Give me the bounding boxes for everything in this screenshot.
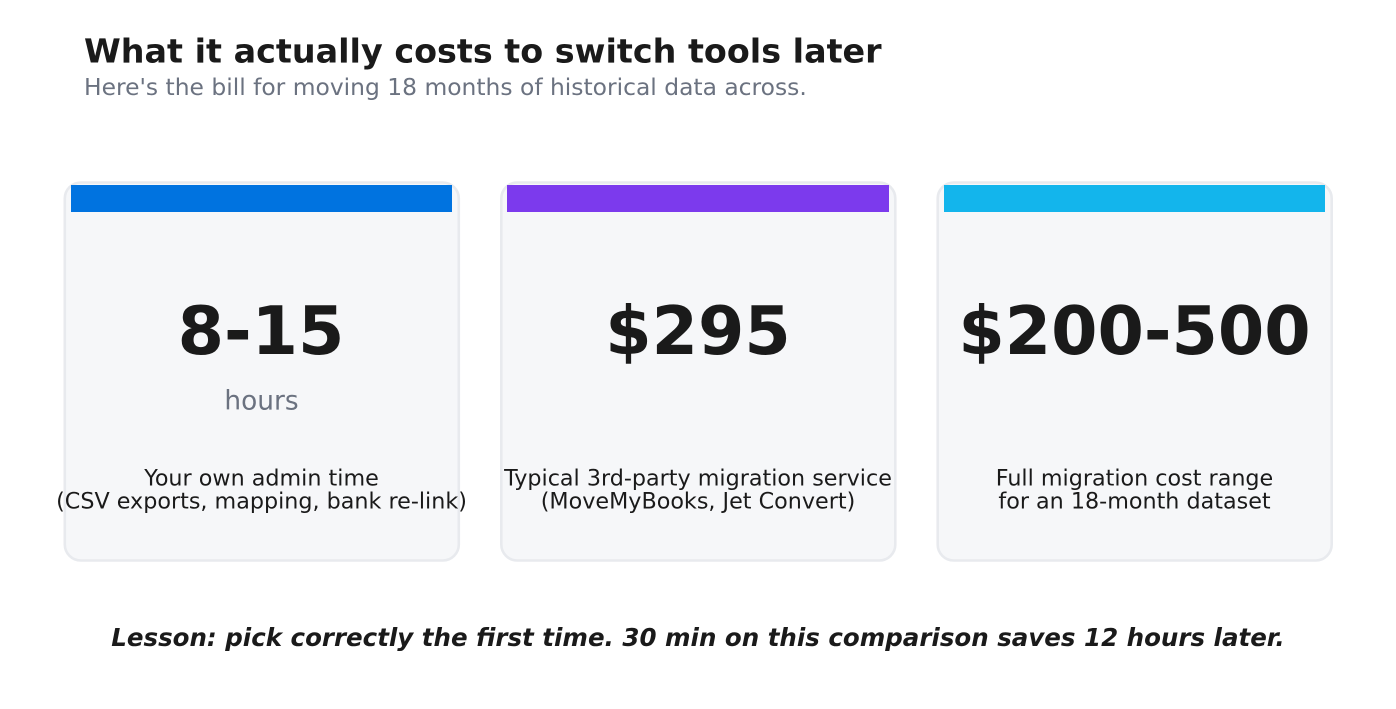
accent bar: cyan	[944, 185, 1325, 212]
card background	[938, 182, 1332, 560]
description: Typical 3rd-party migration service	[503, 466, 892, 492]
description: Your own admin time	[143, 466, 379, 492]
accent bar: purple	[507, 185, 889, 212]
big number: $200-500	[958, 292, 1311, 370]
card background	[501, 182, 895, 560]
big number: 8-15	[178, 292, 344, 370]
card background	[65, 182, 459, 560]
title: What it actually costs to switch tools later	[84, 32, 882, 70]
subtitle: Here's the bill for moving 18 months of historical data across.	[84, 73, 807, 101]
description: for an 18-month dataset	[998, 488, 1271, 514]
description: (CSV exports, mapping, bank re-link)	[56, 488, 467, 514]
description: (MoveMyBooks, Jet Convert)	[541, 488, 855, 514]
lesson callout: Lesson: pick correctly the first time. 30 min on this comparison saves 12 hours later.	[111, 623, 1285, 652]
panel: full cost range	[938, 182, 1332, 560]
panel: admin hours	[56, 182, 467, 560]
big number: $295	[605, 292, 791, 370]
accent bar: blue	[71, 185, 452, 212]
description: Full migration cost range	[996, 466, 1273, 492]
panel: migration service	[501, 182, 895, 560]
unit label: hours	[224, 386, 299, 416]
